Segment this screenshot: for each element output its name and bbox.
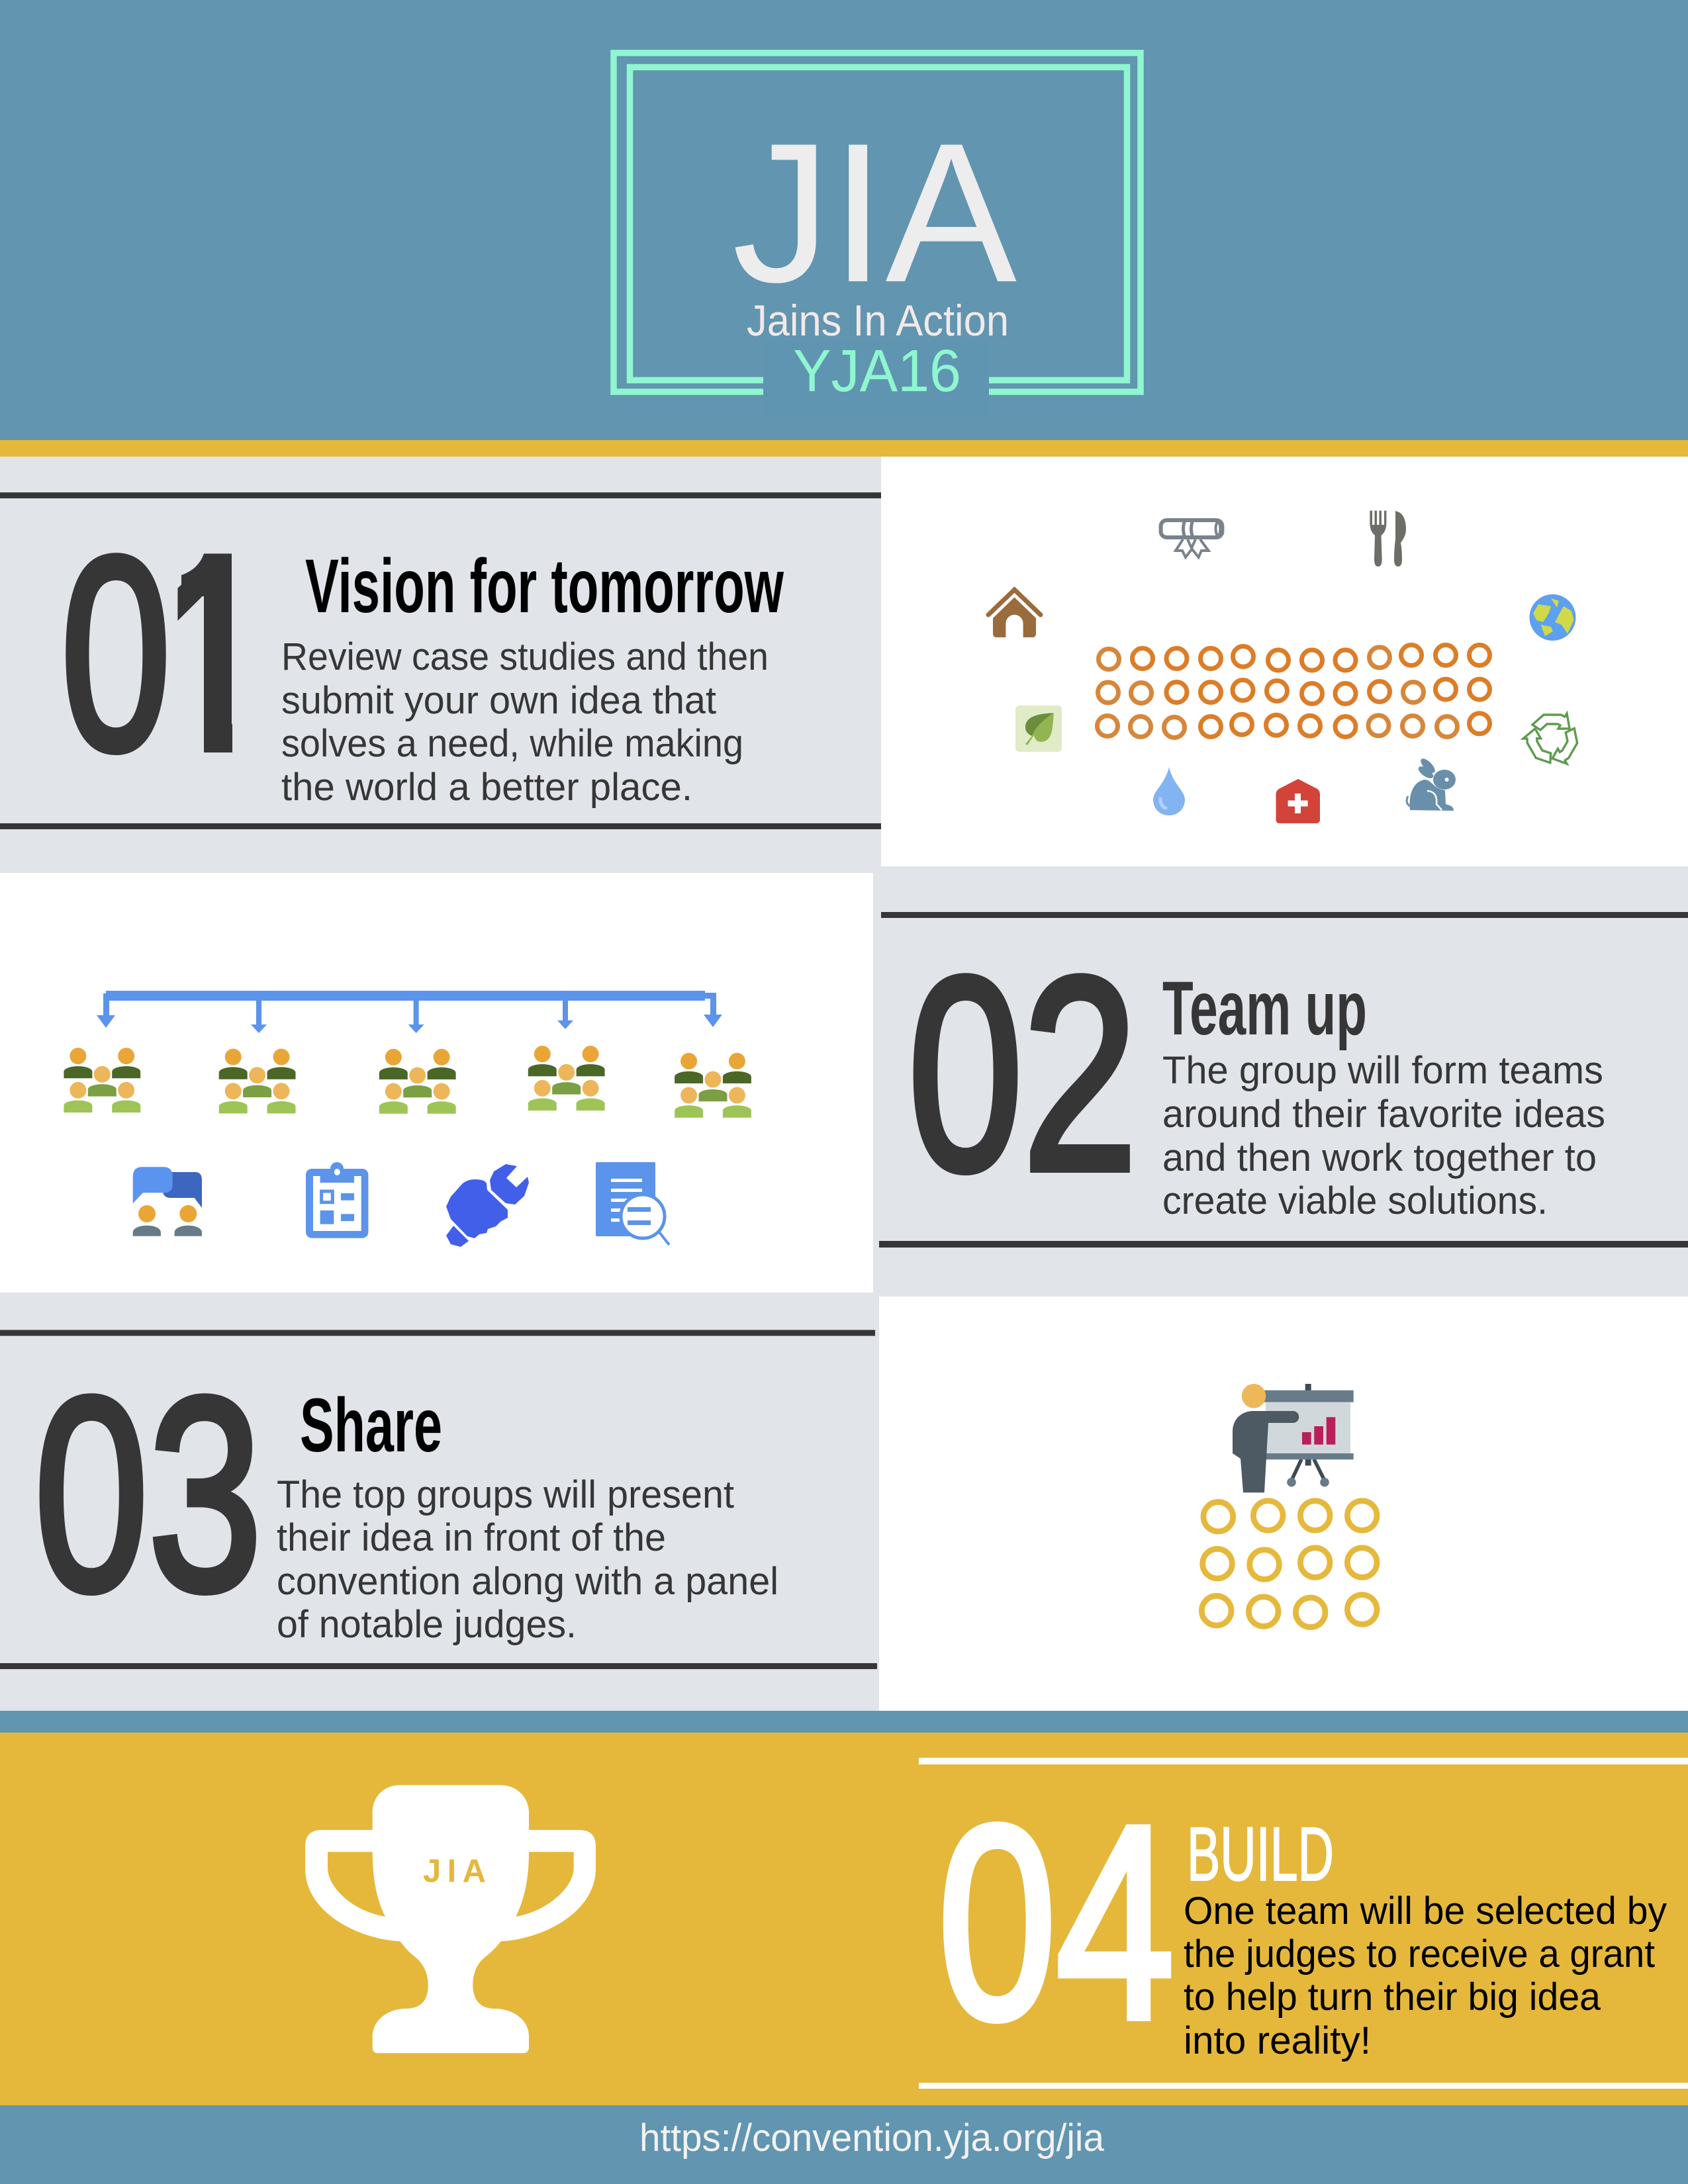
body text 01: Review case studies and then xyxy=(281,635,769,678)
heading: Share: Share xyxy=(300,1383,442,1468)
body text 01: solves a need, while making xyxy=(281,722,743,765)
title: JIA: JIA xyxy=(732,101,1017,324)
icon: rabbit xyxy=(1407,756,1456,811)
heading: BUILD: BUILD xyxy=(1187,1812,1334,1897)
team group 1 xyxy=(64,1048,140,1113)
icon: fork and knife xyxy=(1370,511,1406,567)
body text 04: into reality! xyxy=(1184,2019,1371,2062)
body text 02: and then work together to xyxy=(1162,1136,1597,1179)
body text 04: to help turn their big idea xyxy=(1184,1976,1601,2019)
body text 03: their idea in front of the xyxy=(277,1516,666,1559)
body text 02: create viable solutions. xyxy=(1162,1179,1548,1222)
icon: recycling arrows xyxy=(1522,713,1584,768)
icon: house xyxy=(988,590,1041,637)
audience rings: 12 by 3 xyxy=(1098,645,1489,737)
panel: step 04 build xyxy=(0,1733,1688,2105)
footer url: https://convention.yja.org/jia xyxy=(639,2116,1105,2160)
team group 2 xyxy=(219,1048,295,1113)
subtitle: Jains In Action: Jains In Action xyxy=(747,296,1009,345)
body text 03: convention along with a panel xyxy=(277,1560,778,1603)
icon: trophy xyxy=(305,1785,596,2053)
heading: Team up: Team up xyxy=(1162,966,1367,1051)
icon: document search xyxy=(596,1162,669,1245)
icon: water drop xyxy=(1153,767,1185,815)
panel: needs illustration xyxy=(881,457,1688,866)
footer band xyxy=(0,2105,1688,2184)
header banner xyxy=(0,0,1688,457)
frame gap patch xyxy=(763,341,989,417)
panel: step 01 vision for tomorrow xyxy=(0,457,881,873)
icon: discussion xyxy=(133,1167,202,1236)
team group 3 xyxy=(379,1049,456,1114)
body text 04: the judges to receive a grant xyxy=(1184,1933,1655,1976)
number 01: 0 xyxy=(61,500,171,807)
team group 5 xyxy=(675,1053,751,1118)
divider band xyxy=(0,1711,1688,1733)
title frame xyxy=(614,53,1141,392)
body text 02: around their favorite ideas xyxy=(1162,1093,1605,1136)
number 01: 1 xyxy=(162,500,271,807)
icon: medical cross xyxy=(1276,779,1320,823)
body text 03 xyxy=(277,1473,778,1646)
body text 04: One team will be selected by xyxy=(1184,1889,1667,1933)
team group 4 xyxy=(528,1046,605,1111)
body text 01: submit your own idea that xyxy=(281,679,716,722)
body text 04 xyxy=(1184,1889,1667,2062)
audience rings: 4 by 3 xyxy=(1201,1501,1377,1627)
body text 03: The top groups will present xyxy=(277,1473,734,1516)
distribution arrows xyxy=(97,991,722,1033)
body text 03: of notable judges. xyxy=(277,1603,577,1646)
icon: globe xyxy=(1529,594,1575,641)
number 03: 03 xyxy=(34,1340,262,1647)
panel: step 02 team up xyxy=(873,866,1688,1297)
body text 02: The group will form teams xyxy=(1162,1049,1603,1092)
trophy label: JIA: JIA xyxy=(423,1854,486,1889)
body text 01: the world a better place. xyxy=(281,766,692,809)
number 02: 02 xyxy=(908,920,1137,1227)
icon: handshake wrench xyxy=(446,1164,529,1247)
panel: step 03 share xyxy=(0,1293,879,1711)
panel: presentation illustration xyxy=(879,1297,1688,1711)
body text 02 xyxy=(1162,1049,1605,1222)
heading: Vision for tomorrow: Vision for tomorrow xyxy=(305,544,784,629)
panel: team illustration xyxy=(0,873,873,1293)
number 04: 04 xyxy=(938,1768,1174,2075)
icon: clipboard xyxy=(306,1162,368,1238)
icon: presenter at chart board xyxy=(1233,1384,1354,1492)
icon: leaf xyxy=(1015,705,1062,752)
event name: YJA16: YJA16 xyxy=(793,338,961,404)
icon: diploma scroll xyxy=(1161,520,1222,557)
body text 01 xyxy=(281,635,769,809)
